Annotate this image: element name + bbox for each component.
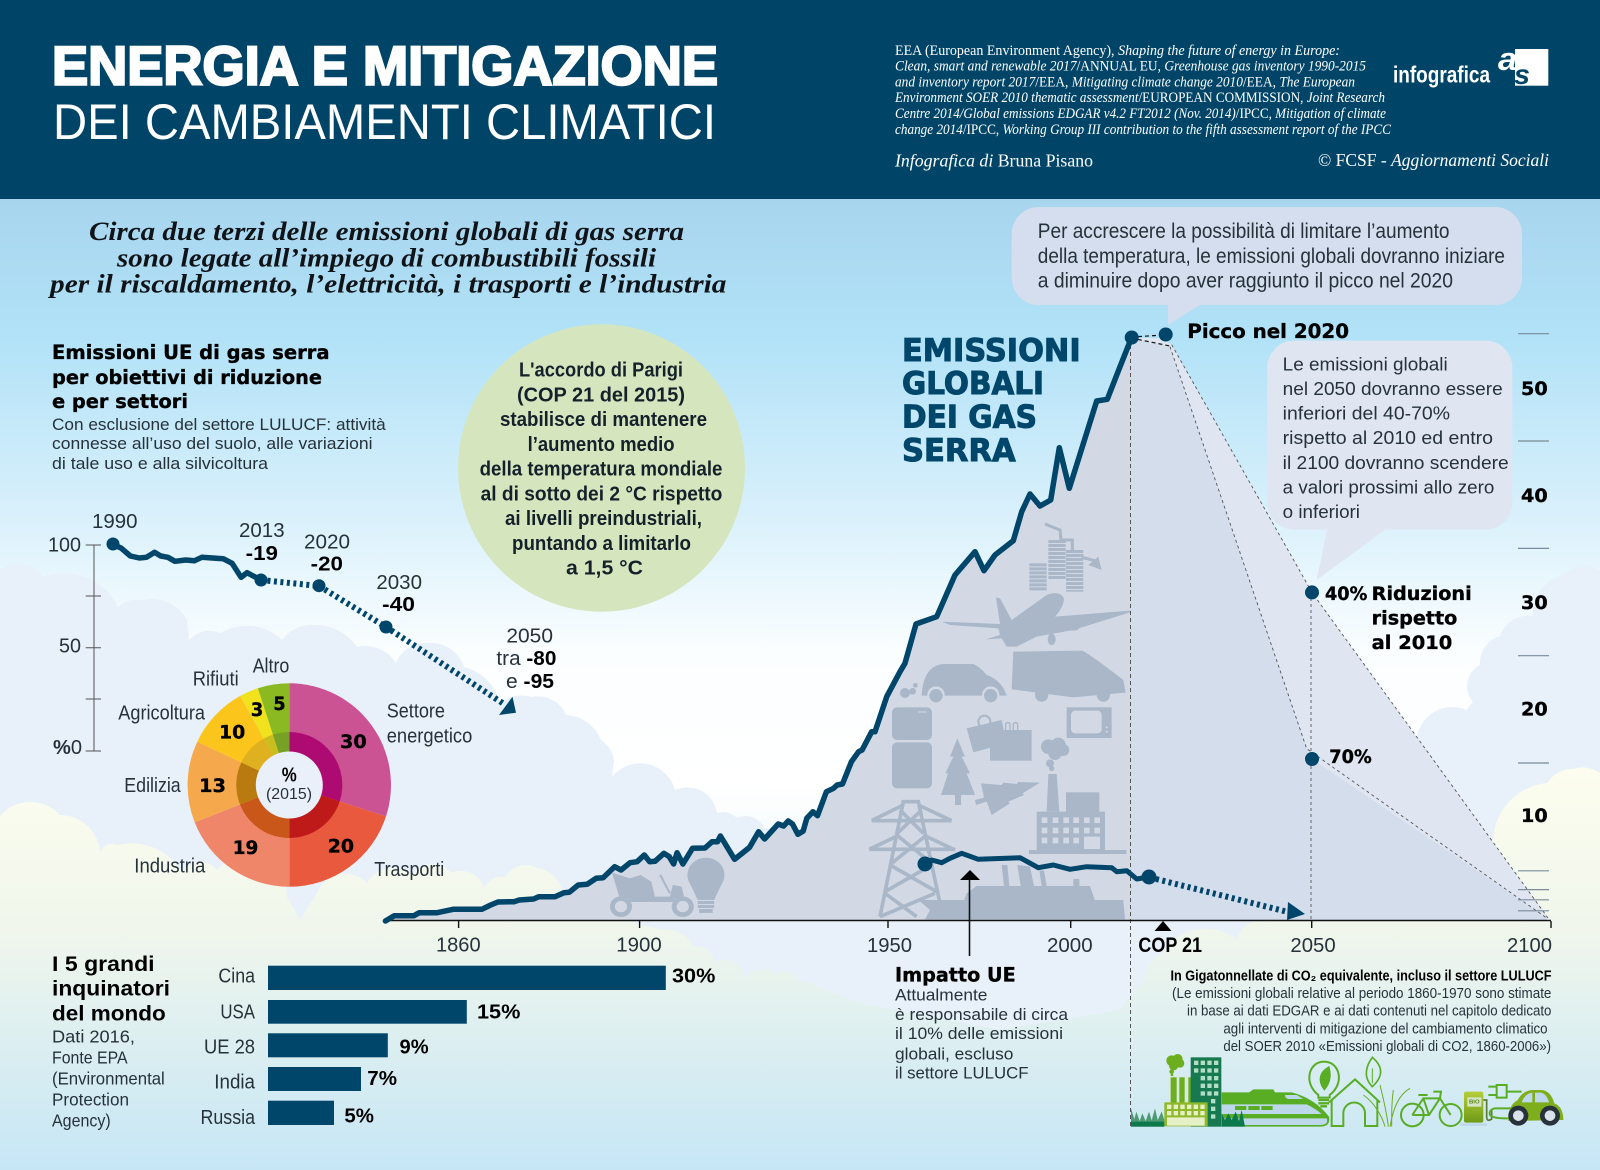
callout: 2050 bubble: il 2100 dovranno scendere xyxy=(1283,452,1509,473)
credit: copyright: © FCSF - Aggiornamenti Sociali xyxy=(1318,150,1549,170)
chart: sector donut: 19 xyxy=(233,837,258,859)
bar: Russia: Russia xyxy=(200,1107,256,1129)
sources text: and inventory report 2017/EEA, Mitigating climate change 2010/EEA, The European xyxy=(895,75,1355,91)
bar: India xyxy=(214,1067,397,1093)
chart: EU emission line: tra -80 xyxy=(496,648,556,670)
callout: 2050 bubble: a valori prossimi allo zero xyxy=(1283,477,1494,498)
note: units and sources: del SOER 2010 «Emissioni globali di CO2, 1860-2006») xyxy=(1223,1039,1551,1055)
title: DEI CAMBIAMENTI CLIMATICI xyxy=(53,94,716,150)
labels: reduction scenarios xyxy=(1325,584,1472,768)
labels: reduction scenarios: al 2010 xyxy=(1372,633,1452,654)
chart: EU emission line: -40 xyxy=(382,594,415,616)
sources text xyxy=(894,43,1391,138)
callout: Paris agreement: (COP 21 del 2015) xyxy=(517,384,685,406)
callout: Paris agreement: a 1,5 °C xyxy=(566,558,643,580)
sources text: Clean, smart and renewable 2017/ANNUAL EU, Greenhouse gas inventory 1990-2015 xyxy=(895,59,1366,75)
panel: top polluters text: inquinatori xyxy=(52,978,170,1001)
icon: factory with smoke xyxy=(1164,1054,1221,1127)
bar: Russia xyxy=(200,1101,374,1129)
title: global emissions: GLOBALI xyxy=(902,366,1044,402)
icons: grey silhouettes xyxy=(869,524,1130,919)
callout: Paris agreement: della temperatura mondiale xyxy=(480,458,722,480)
chart: sector donut: (2015) xyxy=(266,786,312,803)
chart: sector donut: Edilizia xyxy=(124,775,181,797)
callout: Paris agreement: al di sotto dei 2 °C rispetto xyxy=(481,484,722,506)
bar chart: top polluters xyxy=(200,965,715,1129)
chart: EU emission line: 2020 xyxy=(304,532,350,554)
note: units and sources: agli interventi di mitigazione del cambiamento climatico xyxy=(1223,1021,1548,1037)
axis year labels: 2050 xyxy=(1290,935,1336,957)
icon: grass left xyxy=(1131,1108,1164,1127)
wedge: 70 percent scenario xyxy=(1131,338,1547,921)
note: units and sources xyxy=(1170,969,1552,1055)
icon: plug and cable xyxy=(1488,1085,1522,1118)
panel: EU impact text: il settore LULUCF xyxy=(895,1064,1028,1082)
chart: sector donut: 10 xyxy=(219,721,245,743)
bar: Cina: 30% xyxy=(672,965,715,988)
intro statement: per il riscaldamento, l’elettricità, i trasporti e l’industria xyxy=(48,270,726,299)
bar: India: India xyxy=(214,1071,256,1093)
panel: EU impact text: il 10% delle emissioni xyxy=(895,1025,1063,1043)
icon: fridge xyxy=(892,707,932,788)
bar: USA: 15% xyxy=(477,1000,520,1023)
axis line xyxy=(385,920,1551,928)
chart: EU emission line: 2013 xyxy=(239,520,285,542)
chart: right scale: 30 xyxy=(1521,592,1548,614)
icon: light bulb xyxy=(687,858,725,913)
callout: 2050 bubble: nel 2050 dovranno essere xyxy=(1283,378,1503,399)
chart: EU axis: %0 xyxy=(53,737,82,759)
intro statement: Circa due terzi delle emissioni globali di gas serra xyxy=(89,217,684,246)
icon: coins xyxy=(1038,524,1102,592)
chart: EU emission line: 2030 xyxy=(376,572,422,594)
icon: pylon xyxy=(869,802,955,917)
sources text: Centre 2014/Global emissions EDGAR v4.2 FT2012 (Nov. 2014)/IPCC, Mitigation of climate xyxy=(895,106,1387,122)
background clouds: blue layer xyxy=(0,564,1600,1030)
icon: felled tree xyxy=(975,782,1040,815)
axis year labels: 1950 xyxy=(867,935,912,957)
logo: s xyxy=(1514,59,1530,90)
chart: EU axis: 50 xyxy=(59,636,81,658)
callout: Paris agreement: stabilisce di mantenere xyxy=(500,409,707,431)
panel: EU heading: di tale uso e alla silvicoltura xyxy=(52,455,269,473)
icon: television xyxy=(1067,707,1112,738)
panel: EU heading xyxy=(52,341,387,473)
logo xyxy=(1393,41,1548,90)
credit: author: Infografica di Bruna Pisano xyxy=(894,150,1093,170)
bar: USA xyxy=(220,1000,520,1024)
chart: global emissions mountain xyxy=(385,328,1551,1126)
icons: green future strip xyxy=(1131,1054,1563,1127)
panel: top polluters text xyxy=(52,953,170,1131)
chart: right scale xyxy=(1518,334,1549,911)
panel: EU heading: per obiettivi di riduzione xyxy=(52,366,322,389)
title: global emissions: DEI GAS xyxy=(902,400,1037,436)
callout: peak bubble xyxy=(1012,207,1522,325)
icon: airplane xyxy=(942,593,1130,647)
callout: 2050 bubble: inferiori del 40-70% xyxy=(1283,402,1450,423)
chart: right scale: 10 xyxy=(1521,805,1548,827)
chart: right scale: 40 xyxy=(1521,485,1548,507)
sources text: EEA (European Environment Agency), Shaping the future of energy in Europe: xyxy=(895,43,1340,59)
header band xyxy=(0,0,1600,199)
chart: sector donut: 20 xyxy=(328,836,354,858)
chart: EU axis xyxy=(48,535,101,759)
panel: top polluters text: del mondo xyxy=(52,1003,166,1026)
chart: sector donut: 5 xyxy=(273,693,286,715)
chart: sector donut: 3 xyxy=(251,699,263,721)
callout: Paris agreement xyxy=(458,324,745,612)
panel: EU impact text xyxy=(895,964,1069,1082)
marker: COP 21 xyxy=(1138,921,1202,957)
panel: top polluters text: Protection xyxy=(52,1090,129,1110)
intro statement xyxy=(48,217,726,299)
panel: top polluters text: Agency) xyxy=(52,1111,111,1131)
callout: Paris agreement: puntando a limitarlo xyxy=(512,533,691,555)
chart: EU emission line: -20 xyxy=(311,554,343,576)
note: units and sources: (Le emissioni globali relative al periodo 1860-1970 sono stimate xyxy=(1172,986,1551,1002)
chart: sector donut: Settore xyxy=(387,700,445,722)
marker: COP 21: COP 21 xyxy=(1138,934,1202,957)
icon: car xyxy=(900,664,1007,704)
title: ENERGIA E MITIGAZIONE xyxy=(52,34,718,96)
chart: sector donut: Trasporti xyxy=(374,859,444,881)
panel: EU heading: e per settori xyxy=(52,390,188,413)
axis year labels: 1860 xyxy=(436,935,481,957)
panel: top polluters text: Dati 2016, xyxy=(52,1026,135,1046)
icon: factory xyxy=(1029,738,1126,854)
logo: infografica xyxy=(1393,62,1490,88)
title: global emissions: EMISSIONI xyxy=(902,333,1081,369)
chart: EU impact line xyxy=(918,853,1305,920)
chart: EU emission line: -19 xyxy=(246,543,278,565)
title: global emissions xyxy=(902,333,1081,469)
wedge: 40 percent scenario xyxy=(1131,338,1548,921)
sources text: change 2014/IPCC, Working Group III contribution to the fifth assessment report of the IPCC xyxy=(895,122,1391,138)
note: units and sources: In Gigatonnellate di CO₂ equivalente, incluso il settore LULUCF xyxy=(1170,969,1552,985)
bar: UE 28: UE 28 xyxy=(204,1036,255,1058)
panel: top polluters text: (Environmental xyxy=(52,1068,165,1088)
bar: India: 7% xyxy=(367,1067,397,1090)
chart: sector donut: 13 xyxy=(199,775,226,797)
chart: EU emission line: 2050 xyxy=(506,626,553,648)
chart: sector donut: Rifiuti xyxy=(193,669,239,691)
bar: UE 28: 9% xyxy=(400,1035,429,1058)
chart: sector donut: Altro xyxy=(253,656,289,678)
icon: bio pump: BIO xyxy=(1469,1100,1480,1106)
peak markers xyxy=(1125,328,1319,766)
panel: EU impact text: Attualmente xyxy=(895,986,987,1004)
panel: EU heading: Con esclusione del settore LULUCF: attività xyxy=(52,416,387,434)
labels: reduction scenarios: Riduzioni xyxy=(1372,584,1472,605)
title xyxy=(52,34,718,150)
bar: Russia: 5% xyxy=(344,1104,374,1127)
panel: EU impact text: globali, escluso xyxy=(895,1045,1013,1063)
panel: EU impact text: Impatto UE xyxy=(895,964,1016,987)
icon: green bulb xyxy=(1309,1062,1339,1106)
background clouds: lower pale layer xyxy=(0,767,1600,1170)
emissions curve line xyxy=(385,337,1132,921)
callout: 2050 bubble: rispetto al 2010 ed entro xyxy=(1283,427,1493,448)
labels: reduction scenarios: rispetto xyxy=(1372,608,1457,629)
panel: top polluters text: Fonte EPA xyxy=(52,1047,128,1067)
icon: bicycle xyxy=(1401,1092,1462,1126)
bar: USA: USA xyxy=(220,1001,256,1023)
icon: shopping bags xyxy=(967,716,1032,761)
chart: sector donut: Agricoltura xyxy=(118,702,206,724)
callout: peak bubble: a diminuire dopo aver raggiunto il picco nel 2020 xyxy=(1038,270,1453,293)
chart: sector donut xyxy=(118,656,472,887)
chart: EU emission line xyxy=(92,511,556,715)
chart: sector donut: % xyxy=(282,765,297,787)
logo: a xyxy=(1498,41,1517,77)
bar: Cina: Cina xyxy=(218,966,256,988)
panel: EU heading: Emissioni UE di gas serra xyxy=(52,341,330,364)
panel: EU heading: connesse all’uso del suolo, alle variazioni xyxy=(52,435,372,453)
icon: house with leaf xyxy=(1329,1057,1381,1126)
callout: peak bubble: della temperatura, le emissioni globali dovranno iniziare xyxy=(1038,245,1505,268)
labels: reduction scenarios: 70% xyxy=(1329,747,1372,768)
axis year labels xyxy=(436,935,1552,957)
callout: 2050 bubble: o inferiori xyxy=(1283,501,1360,522)
axis year labels: 2000 xyxy=(1047,935,1093,957)
icon: old tractor xyxy=(612,873,691,915)
chart: sector donut: Industria xyxy=(134,855,206,877)
icon: high speed train xyxy=(1222,1089,1329,1127)
icon: reeds xyxy=(1363,1085,1410,1127)
icon: van xyxy=(1012,651,1126,702)
title: global emissions: SERRA xyxy=(902,433,1016,469)
icon: second grass xyxy=(1222,1110,1245,1127)
icon: electric car xyxy=(1508,1090,1563,1126)
callout: 2050 bubble xyxy=(1267,341,1512,580)
icon: standing tree xyxy=(941,738,975,805)
sources text: Environment SOER 2010 thematic assessment/EUROPEAN COMMISSION, Joint Research xyxy=(894,90,1385,106)
chart: EU axis: 100 xyxy=(48,535,81,557)
bar: UE 28 xyxy=(204,1033,429,1058)
chart: EU emission line: e -95 xyxy=(506,671,554,693)
note: units and sources: in base ai dati EDGAR e ai dati contenuti nel capitolo dedicato xyxy=(1187,1004,1551,1020)
callout: Paris agreement: L'accordo di Parigi xyxy=(519,360,683,382)
icon: ship xyxy=(918,865,1125,919)
chart: right scale: 50 xyxy=(1521,378,1548,400)
panel: top polluters text: I 5 grandi xyxy=(52,953,155,976)
intro statement: sono legate all’impiego di combustibili fossili xyxy=(116,244,657,273)
chart: EU emission line: 1990 xyxy=(92,511,138,533)
chart: sector donut: 30 xyxy=(340,731,367,753)
arrow: impact pointer xyxy=(960,870,980,956)
callout: peak bubble: Per accrescere la possibilità di limitare l’aumento xyxy=(1038,220,1450,243)
callout: Paris agreement: l’aumento medio xyxy=(528,434,675,456)
callout: Paris agreement: ai livelli preindustriali, xyxy=(505,508,702,530)
callout: 2050 bubble: Le emissioni globali xyxy=(1283,353,1448,374)
panel: EU impact text: è responsabile di circa xyxy=(895,1006,1069,1024)
bar: Cina xyxy=(218,965,715,990)
icon: bio pump xyxy=(1460,1092,1492,1126)
chart: sector donut: energetico xyxy=(387,725,472,747)
labels: reduction scenarios: 40% xyxy=(1325,584,1367,605)
chart: right scale: 20 xyxy=(1521,698,1548,720)
axis year labels: 1900 xyxy=(616,935,662,957)
axis year labels: 2100 xyxy=(1507,935,1552,957)
label: peak 2020: Picco nel 2020 xyxy=(1187,320,1349,343)
